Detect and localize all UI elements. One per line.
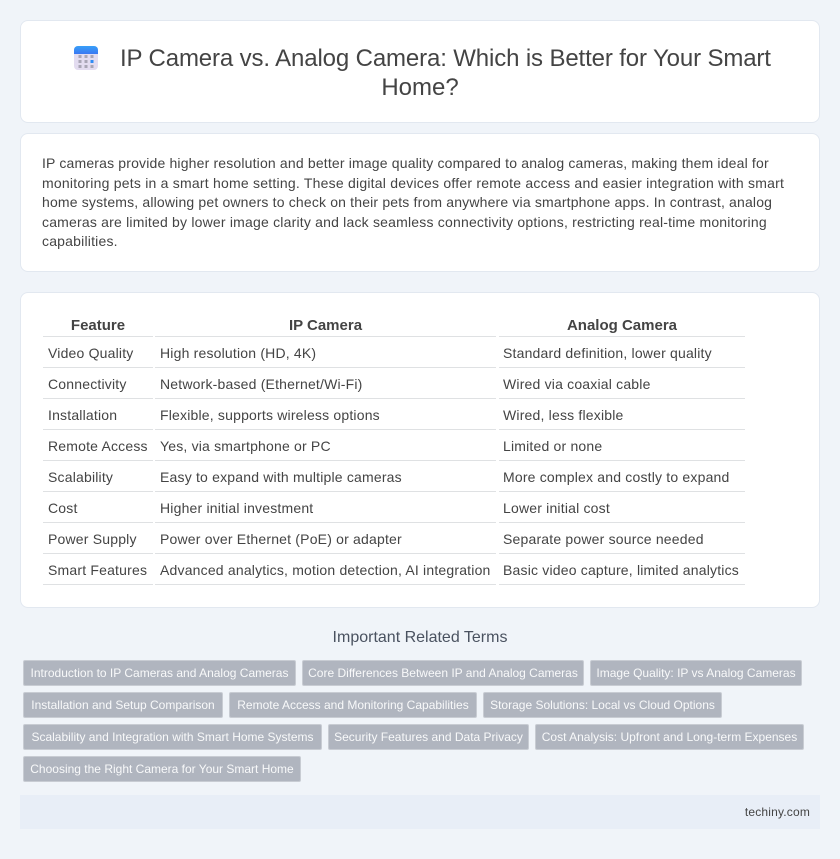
row: connectivity: Wired via coaxial cable — [503, 376, 651, 392]
row: video quality: Standard definition, lower quality — [503, 345, 712, 361]
footer bar — [20, 795, 820, 829]
row: connectivity — [48, 376, 651, 392]
row: scalability: Scalability — [48, 469, 113, 485]
table header row: IP Camera — [289, 317, 362, 334]
row: cost: Lower initial cost — [503, 500, 610, 516]
tag: Remote Access and Monitoring Capabilities — [237, 698, 469, 712]
text: introduction paragraph — [42, 155, 784, 249]
tag: Image Quality: IP vs Analog Cameras — [596, 666, 796, 680]
row: smart features: Basic video capture, limited analytics — [503, 562, 739, 578]
table header row: Feature — [71, 317, 125, 334]
row: scalability — [48, 469, 730, 485]
tag: Introduction to IP Cameras and Analog Cameras — [31, 666, 288, 680]
panel: introduction — [20, 133, 820, 272]
row: scalability: More complex and costly to expand — [503, 469, 730, 485]
title: IP Camera vs. Analog Camera: Which is Better for Your Smart — [120, 45, 771, 72]
panel: header — [20, 20, 820, 123]
row: power supply — [48, 531, 704, 547]
tag: Core Differences Between IP and Analog Cameras — [308, 666, 578, 680]
tag — [535, 724, 804, 750]
tag — [23, 692, 223, 718]
text: introduction paragraph: capabilities. — [42, 233, 118, 249]
row: connectivity: Network-based (Ethernet/Wi-Fi) — [160, 376, 363, 392]
text: introduction paragraph: home systems, allowing pet owners to check on their pets from anywhere via smartphone apps. In contrast, analog — [42, 194, 772, 210]
tag — [23, 724, 322, 750]
row: installation: Installation — [48, 407, 117, 423]
tag — [483, 692, 722, 718]
row: installation — [48, 407, 624, 423]
row: remote access — [48, 438, 602, 454]
tag: Choosing the Right Camera for Your Smart Home — [30, 762, 294, 776]
row: smart features — [48, 562, 739, 578]
text: introduction paragraph: monitoring pets in a smart home setting. These digital devices offer remote access and easier integration with smart — [42, 175, 784, 191]
tag: Scalability and Integration with Smart Home Systems — [31, 730, 314, 744]
row: remote access: Remote Access — [48, 438, 148, 454]
row: smart features: Advanced analytics, motion detection, AI integration — [160, 562, 491, 578]
row: video quality — [48, 345, 712, 361]
row: smart features: Smart Features — [48, 562, 147, 578]
panel: comparison table — [20, 292, 820, 608]
heading: important related terms: Important Related Terms — [333, 629, 507, 646]
row: remote access: Yes, via smartphone or PC — [160, 438, 331, 454]
related terms tags — [23, 660, 804, 782]
text: introduction paragraph: cameras are limited by lower image clarity and lack seamless connectivity options, restricting real-time monitoring — [42, 214, 767, 230]
text: introduction paragraph: IP cameras provide higher resolution and better image quality compared to analog cameras, making them ideal for — [42, 155, 769, 171]
row: video quality: High resolution (HD, 4K) — [160, 345, 316, 361]
tag: Security Features and Data Privacy — [334, 730, 523, 744]
row: cost — [48, 500, 610, 516]
row: cost: Cost — [48, 500, 78, 516]
table header row: Analog Camera — [567, 317, 677, 334]
row: cost: Higher initial investment — [160, 500, 313, 516]
tag — [590, 660, 802, 686]
row: power supply: Power Supply — [48, 531, 137, 547]
row: power supply: Separate power source needed — [503, 531, 704, 547]
tag — [302, 660, 584, 686]
tag: Installation and Setup Comparison — [31, 698, 215, 712]
title — [120, 45, 771, 101]
footer text: techiny.com — [745, 805, 810, 819]
row: remote access: Limited or none — [503, 438, 602, 454]
title: Home? — [381, 74, 459, 101]
row: scalability: Easy to expand with multiple cameras — [160, 469, 402, 485]
row: installation: Flexible, supports wireless options — [160, 407, 380, 423]
table header row — [71, 317, 678, 334]
tag — [23, 756, 301, 782]
tag — [23, 660, 296, 686]
tag: Cost Analysis: Upfront and Long-term Expenses — [542, 730, 797, 744]
row: installation: Wired, less flexible — [503, 407, 624, 423]
tag — [229, 692, 477, 718]
icon: calendar — [74, 46, 98, 70]
comparison table — [43, 317, 745, 585]
tag — [328, 724, 529, 750]
tag: Storage Solutions: Local vs Cloud Options — [490, 698, 715, 712]
row: connectivity: Connectivity — [48, 376, 127, 392]
row: power supply: Power over Ethernet (PoE) or adapter — [160, 531, 402, 547]
row: video quality: Video Quality — [48, 345, 134, 361]
